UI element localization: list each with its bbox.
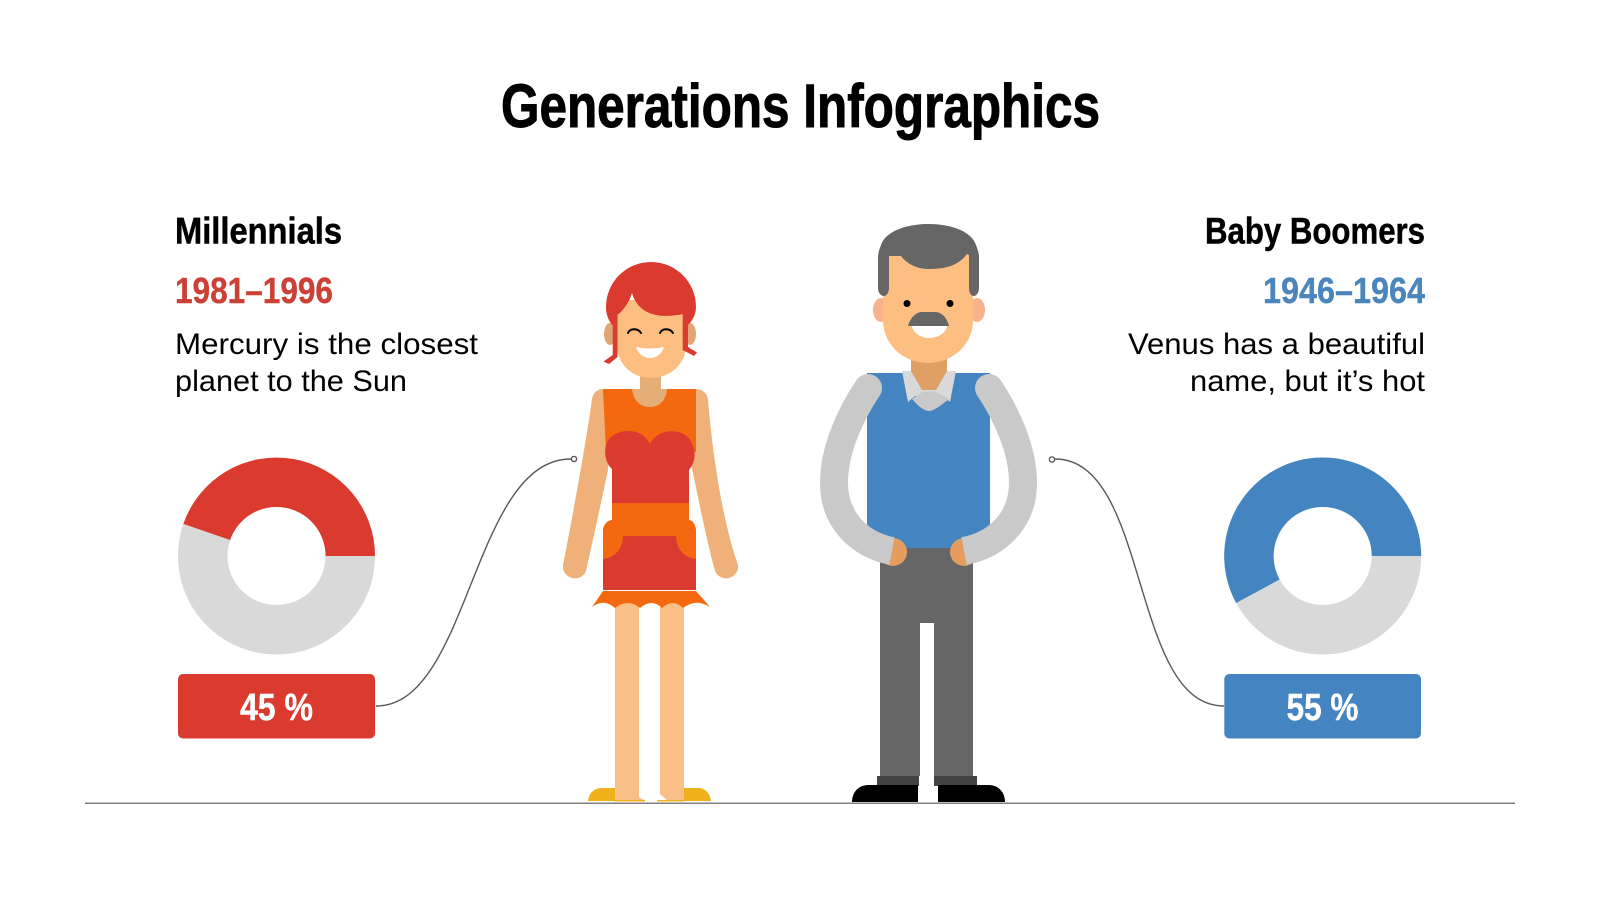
- connector: 55 % badge to man: [1049, 457, 1224, 706]
- hands: [879, 538, 978, 566]
- shoes: [588, 788, 711, 802]
- hair: [604, 262, 697, 364]
- years: 1981–1996: 1981–1996: [175, 270, 333, 311]
- collar: [902, 371, 956, 402]
- donut chart: baby boomers 55%: [1224, 457, 1421, 654]
- illustration: man: [834, 224, 1023, 802]
- years: 1946–1964: 1946–1964: [1263, 270, 1425, 311]
- badge: 55 %: 55 %: [1286, 687, 1358, 729]
- ears: [604, 323, 696, 345]
- description: baby boomers: Venus has a beautiful: [1128, 328, 1425, 361]
- badge: 45 %: 45 %: [240, 687, 313, 729]
- badge: 45 %: [178, 674, 375, 738]
- ground line: [85, 802, 1515, 804]
- dress: [592, 389, 710, 608]
- heading: Millennials: Millennials: [175, 210, 342, 252]
- description: millennials: Mercury is the closest: [175, 328, 479, 361]
- description: baby boomers: name, but it’s hot: [1190, 365, 1426, 398]
- legs: [615, 596, 684, 801]
- moustache: [908, 312, 949, 326]
- shoes: [852, 785, 1005, 802]
- neck: [911, 350, 947, 390]
- heading: Baby Boomers: Baby Boomers: [1205, 210, 1425, 252]
- arms: [563, 389, 738, 578]
- description: millennials: [175, 328, 479, 398]
- collar knot: [912, 392, 949, 411]
- description: baby boomers: [1128, 328, 1426, 398]
- hair: [878, 224, 979, 296]
- connector: 45 % badge to woman: [376, 456, 577, 706]
- illustration: woman: [563, 262, 738, 802]
- panel: millennials text: [175, 210, 479, 398]
- donut chart: millennials 45%: [178, 458, 375, 654]
- eyes: [904, 300, 954, 307]
- mouth: [636, 347, 664, 358]
- face: [617, 300, 686, 378]
- mouth: [912, 326, 947, 338]
- sleeves: [834, 388, 1023, 551]
- badge: 55 %: [1224, 674, 1421, 738]
- trouser cuffs: [877, 776, 977, 786]
- face: [883, 250, 973, 363]
- eyes: [628, 329, 673, 333]
- trousers: [880, 548, 973, 776]
- vest: [867, 373, 990, 548]
- description: millennials: planet to the Sun: [175, 365, 407, 398]
- title: Generations Infographics: [501, 72, 1100, 140]
- ears: [873, 298, 985, 322]
- neck: [632, 368, 667, 407]
- panel: baby boomers text: [1128, 210, 1426, 398]
